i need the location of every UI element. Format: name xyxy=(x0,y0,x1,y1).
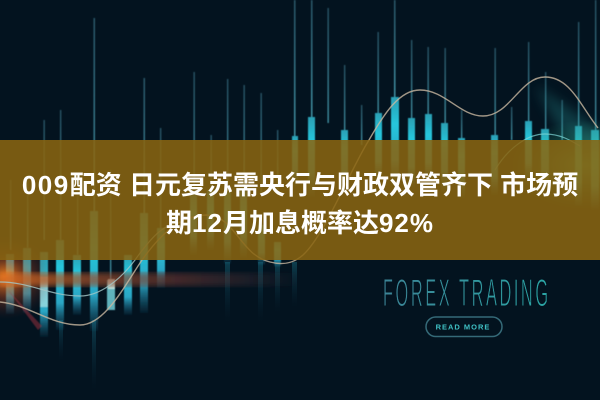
orange light flare xyxy=(0,235,300,330)
headline: 009配资 日元复苏需央行与财政双管齐下 市场预 xyxy=(22,170,578,200)
green light glow xyxy=(510,85,600,210)
translucent title band xyxy=(0,140,600,260)
headline xyxy=(22,170,578,238)
forex trading heading: FOREX TRADING xyxy=(383,272,548,315)
read more button: READ MORE xyxy=(436,322,490,332)
wicks of the candlestick chart xyxy=(10,0,596,280)
candle bodies xyxy=(6,97,599,337)
read more button xyxy=(426,317,502,336)
headline: 期12月加息概率达92% xyxy=(166,208,434,238)
fading candle reflections xyxy=(59,262,297,390)
trend curves xyxy=(0,77,598,325)
